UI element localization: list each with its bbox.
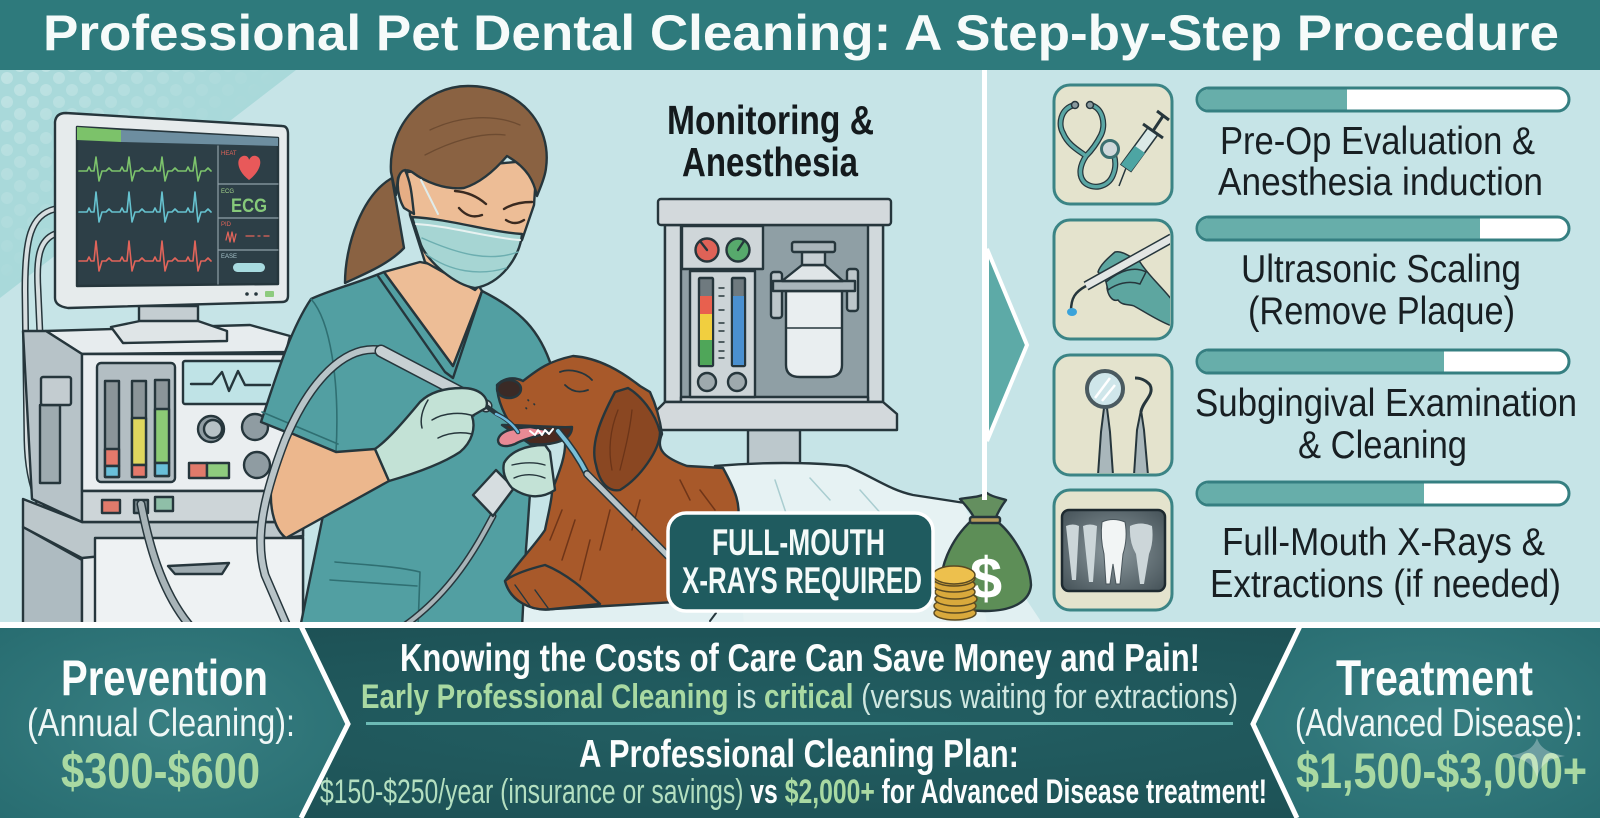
plan comparison line: $150-$250/year (insurance or savings) vs $2,000+ for Advanced Disease treatment! (320, 773, 1267, 811)
panel: treatment: Treatment (1336, 650, 1533, 706)
dog (497, 356, 739, 609)
green ECG trace (79, 157, 211, 181)
panel: prevention: $300-$600 (61, 743, 260, 799)
divider arrow between scene and steps (982, 70, 1027, 500)
lower readouts (221, 222, 269, 272)
ECG readout: ECG (221, 189, 234, 195)
step 4 label: Full-Mouth X-Rays & (1222, 521, 1545, 564)
dog face (497, 370, 592, 408)
step 1: pre-op evaluation (1054, 85, 1569, 204)
vet arm (271, 431, 389, 538)
divider (366, 722, 1233, 725)
step 1 label (1218, 120, 1543, 204)
ECG readout (222, 188, 266, 212)
anesthesia machine (653, 199, 897, 466)
step 2: ultrasonic scaling (1054, 217, 1569, 339)
scaler cable (261, 350, 380, 626)
cyan ECG trace (79, 192, 211, 222)
vet eyes and brows (455, 191, 532, 223)
vet head (391, 86, 547, 290)
cart waveform display (183, 361, 283, 404)
callout: full-mouth x-rays: FULL-MOUTH (712, 522, 885, 563)
vet glove holding scaler (375, 388, 487, 481)
heading: monitoring and anesthesia: Monitoring & (667, 97, 874, 143)
progress bar 4 (1197, 482, 1569, 505)
title banner: Professional Pet Dental Cleaning: A Step-by-Step Procedure (43, 5, 1559, 61)
dog ear (594, 388, 660, 490)
callout: full-mouth x-rays (668, 513, 933, 621)
step 1 label: Anesthesia induction (1218, 161, 1543, 204)
money bag (941, 493, 1031, 611)
cables behind monitor (22, 206, 54, 506)
vaporizer jar (771, 242, 858, 377)
vet hair (391, 86, 547, 196)
red ECG trace (79, 241, 211, 271)
cart buttons (102, 463, 229, 513)
machine dials (682, 226, 763, 269)
step 3 label: & Cleaning (1298, 424, 1467, 467)
step 4 label (1210, 521, 1561, 606)
progress bar 1 (1197, 88, 1569, 111)
patient monitor (55, 113, 288, 343)
anesthesia cart lower cabinet (23, 499, 303, 628)
progress bar 3 (1197, 350, 1569, 373)
sensor clip and cable (404, 470, 514, 626)
anesthesia cart main unit (23, 325, 292, 522)
dental suction tube (558, 431, 668, 556)
step 2 label: (Remove Plaque) (1248, 290, 1515, 333)
money bag: $ (970, 546, 1002, 611)
step 3: subgingival examination (1054, 350, 1577, 475)
heading: monitoring and anesthesia (667, 97, 874, 185)
heart readout: HEAT (221, 151, 237, 157)
side holder (40, 377, 71, 483)
early cleaning line: Early Professional Cleaning is critical (versus waiting for extractions) (361, 678, 1238, 716)
exam table (524, 500, 1040, 622)
icon: dental mirror and probe (1054, 355, 1172, 475)
panel: cost message (320, 637, 1267, 811)
illustration: veterinary scene (23, 86, 1040, 640)
panel: prevention (0, 626, 348, 818)
step 4: x-rays and extractions (1054, 482, 1569, 610)
cart cable (141, 504, 190, 626)
vet scrubs (261, 262, 552, 628)
cart knobs (198, 414, 270, 478)
dog mouth and tongue (498, 425, 572, 446)
coin stack (933, 566, 977, 620)
heading: monitoring and anesthesia: Anesthesia (682, 139, 859, 185)
lower readouts: PID (221, 222, 232, 228)
panel: treatment (1253, 626, 1600, 818)
step 3 label (1195, 382, 1577, 467)
step 2 label: Ultrasonic Scaling (1241, 248, 1521, 291)
cost headline: Knowing the Costs of Care Can Save Money and Pain! (400, 637, 1200, 680)
panel: prevention: Prevention (61, 650, 268, 706)
dog paws (505, 565, 600, 609)
step 4 label: Extractions (if needed) (1210, 563, 1561, 606)
sparkle (1509, 738, 1565, 778)
icon: dental x-ray (1054, 490, 1172, 610)
vet ponytail (345, 178, 404, 283)
heart readout (221, 151, 260, 180)
surgical mask (412, 180, 522, 288)
plan heading: A Professional Cleaning Plan: (579, 733, 1019, 776)
panel: prevention: (Annual Cleaning): (27, 702, 295, 745)
flow meters (690, 271, 755, 397)
icon: scaler in gloved hand (1054, 220, 1172, 339)
step 1 label: Pre-Op Evaluation & (1220, 120, 1535, 163)
background corner with dots (0, 70, 296, 298)
ECG readout: ECG (231, 196, 267, 217)
callout: full-mouth x-rays: X-RAYS REQUIRED (682, 560, 922, 601)
scaler handpiece (381, 351, 518, 432)
blanket (714, 462, 966, 512)
lower readouts: EASE (221, 254, 237, 260)
vet glove holding muzzle (503, 445, 555, 496)
step 2 label (1241, 248, 1521, 333)
icon: stethoscope and syringe (1054, 85, 1172, 204)
progress bar 2 (1197, 217, 1569, 240)
bottom band background (0, 622, 1600, 818)
gauge panel with three bars (97, 363, 175, 482)
